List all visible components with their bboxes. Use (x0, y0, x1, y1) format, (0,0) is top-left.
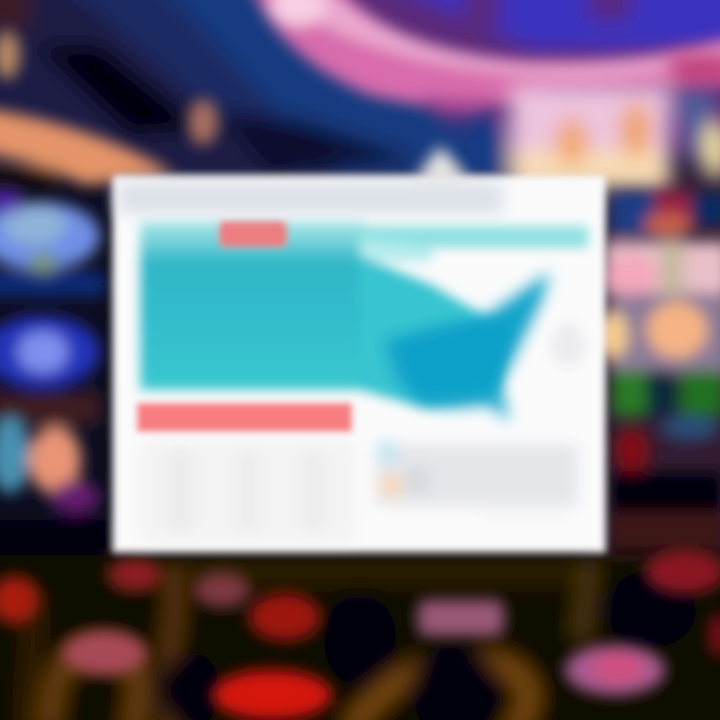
background: casino floor (0, 555, 720, 720)
map note (552, 323, 584, 367)
map of the United States (385, 272, 550, 422)
pink arc (250, 0, 720, 118)
card top band (118, 146, 503, 214)
red section heading (137, 403, 352, 432)
card background (113, 176, 605, 552)
left wall lights (0, 190, 110, 580)
background: venue ceiling (0, 0, 720, 570)
header teal band (140, 222, 588, 408)
legend panel (376, 441, 578, 518)
data table (140, 442, 355, 542)
panel: infographic card (113, 146, 605, 552)
map core (395, 320, 515, 395)
red tag (219, 221, 287, 247)
top-right stage panel (455, 55, 720, 190)
right wall lights (596, 192, 720, 562)
orange light band (0, 31, 218, 190)
red and pink floor lights (0, 550, 720, 720)
